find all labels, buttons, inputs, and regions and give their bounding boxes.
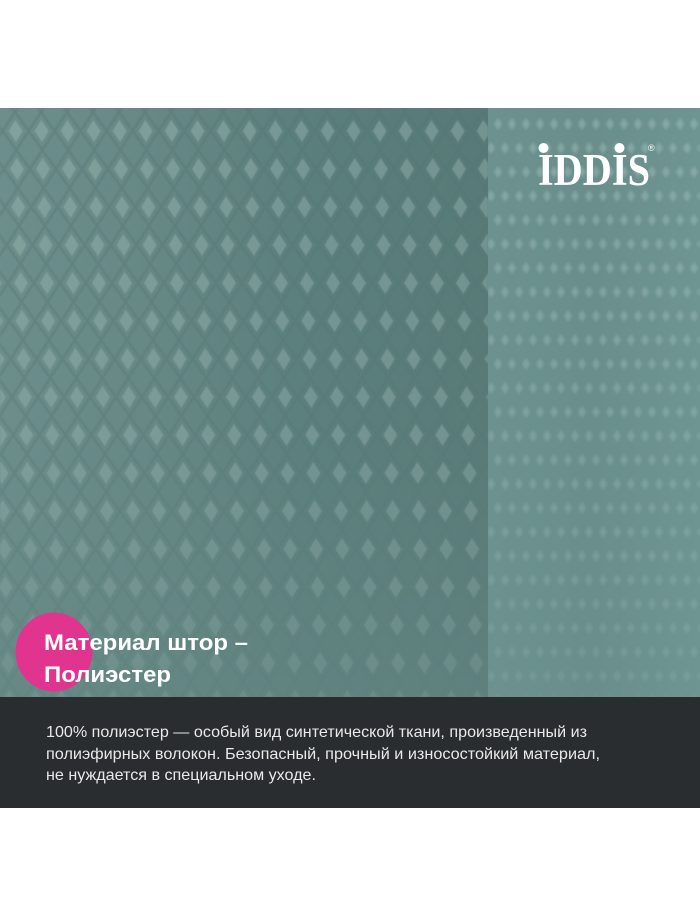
- heading: Материал штор –: [44, 630, 248, 655]
- logo: IDDIS: ®: [648, 143, 655, 153]
- photo: curtain fabric: [0, 108, 700, 697]
- fabric left woven section: [0, 108, 488, 697]
- description text: [46, 724, 600, 784]
- description text: не нуждается в специальном уходе.: [46, 767, 316, 784]
- description text: полиэфирных волокон. Безопасный, прочный и износостойкий материал,: [46, 746, 600, 763]
- infographic canvas: [0, 108, 700, 808]
- fabric right blurred section: [488, 108, 700, 697]
- description text: 100% полиэстер — особый вид синтетической ткани, произведенный из: [46, 724, 587, 741]
- accent: pink circle: [16, 612, 92, 692]
- heading: Полиэстер: [44, 662, 171, 687]
- heading: [44, 630, 248, 687]
- logo: IDDIS: IDDIS: [538, 145, 650, 195]
- panel: description: [0, 697, 700, 808]
